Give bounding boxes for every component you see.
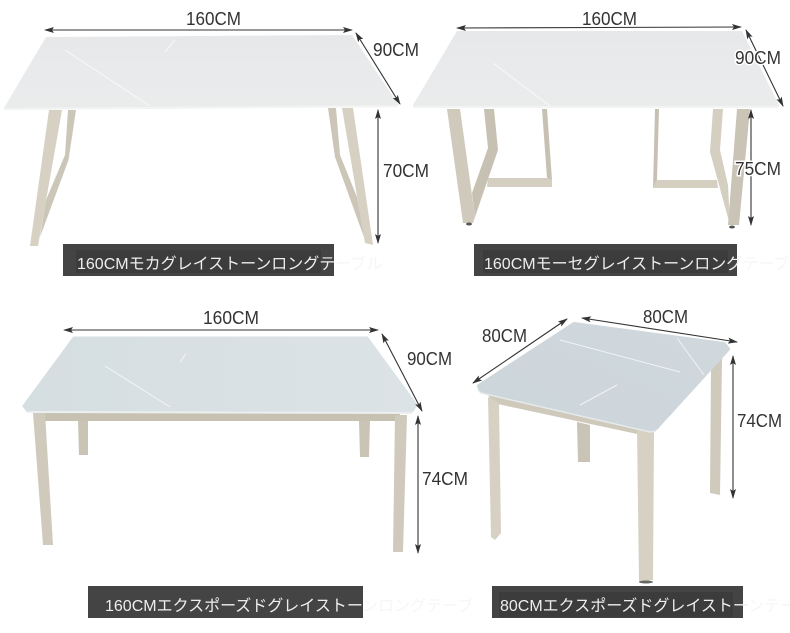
dimension: depth 90CM bbox=[735, 30, 783, 106]
dimension: depth 90CM: 90CM bbox=[407, 349, 452, 369]
table legs and apron bbox=[488, 352, 724, 584]
dimension: height 75CM bbox=[735, 110, 781, 225]
caption banner bbox=[492, 586, 790, 618]
dimension: height 70CM: 70CM bbox=[383, 161, 429, 181]
caption banner bbox=[88, 586, 473, 618]
dimension: width 160CM: 160CM bbox=[582, 9, 637, 29]
dimension: height 74CM bbox=[418, 416, 468, 553]
dimension: width 80CM bbox=[582, 307, 737, 342]
table top bbox=[413, 31, 779, 108]
dimension: depth 80CM: 80CM bbox=[482, 326, 527, 346]
table legs and apron bbox=[33, 413, 407, 552]
caption banner bbox=[63, 244, 382, 276]
dimension: width 80CM: 80CM bbox=[643, 307, 688, 327]
dimension: depth 90CM bbox=[356, 33, 419, 104]
dimension: depth 90CM: 90CM bbox=[373, 40, 419, 60]
dimension: height 70CM bbox=[378, 110, 429, 243]
table legs bbox=[447, 109, 750, 228]
dimension: depth 90CM bbox=[382, 334, 452, 411]
dimension: depth 80CM bbox=[473, 319, 567, 383]
panel: 160cm exposed grey table bbox=[24, 308, 473, 618]
dimension: width 160CM: 160CM bbox=[203, 308, 259, 328]
dimension: height 74CM: 74CM bbox=[422, 469, 468, 489]
table top bbox=[24, 338, 416, 413]
table top bbox=[4, 35, 398, 110]
panel: 160cm mocha grey table bbox=[4, 9, 429, 276]
table legs bbox=[30, 108, 373, 246]
table top bbox=[478, 324, 728, 432]
panel: 160cm morse grey table bbox=[413, 9, 789, 276]
dimension: depth 90CM: 90CM bbox=[735, 48, 781, 68]
caption banner: 160CMモーセグレイストーンロングテーブ bbox=[484, 254, 789, 273]
dimension: height 75CM: 75CM bbox=[735, 159, 781, 179]
dimension: width 160CM: 160CM bbox=[186, 9, 241, 29]
panel: 80cm exposed grey table bbox=[473, 307, 790, 618]
caption banner bbox=[474, 244, 789, 276]
dimension: height 74CM: 74CM bbox=[737, 411, 782, 431]
caption banner: 160CMモカグレイストーンロングテーブル bbox=[77, 254, 382, 273]
caption banner: 160CMエクスポーズドグレイストーンロングテーブ bbox=[105, 596, 473, 615]
